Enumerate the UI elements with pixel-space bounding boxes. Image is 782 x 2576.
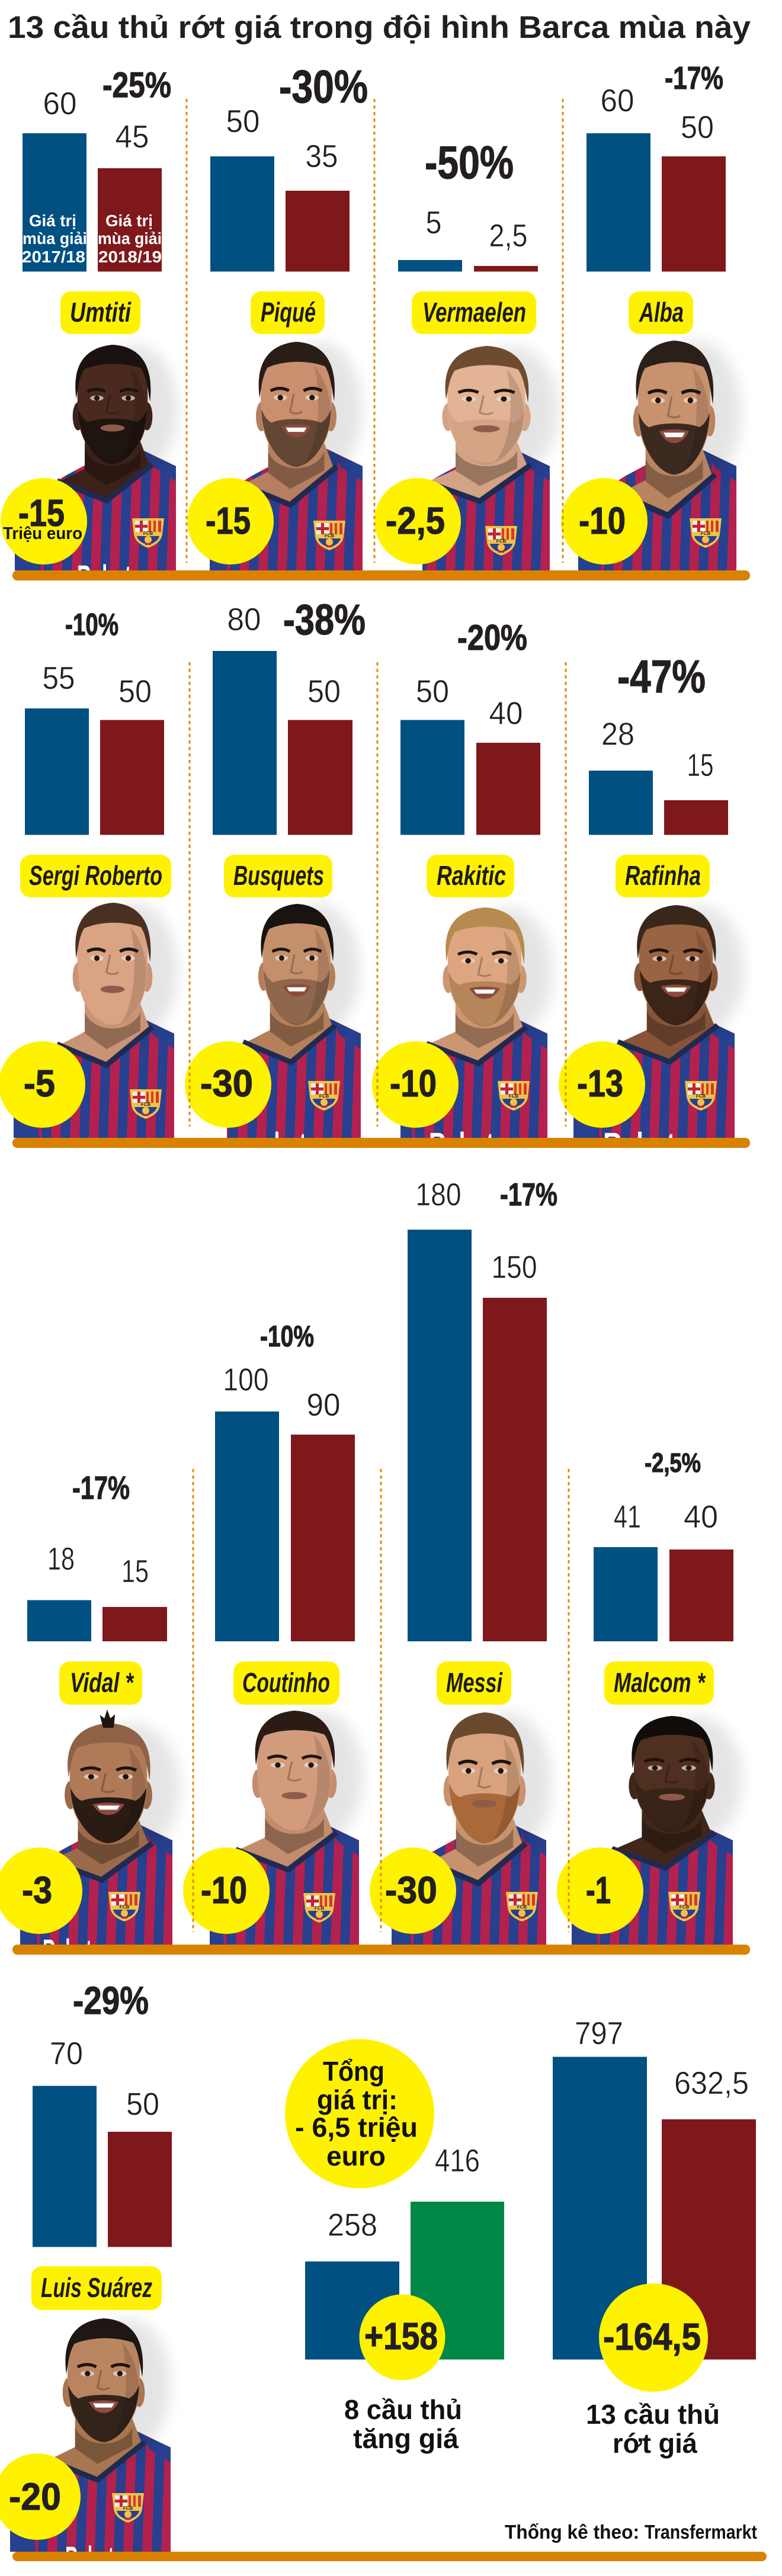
value 70: 70 <box>50 2036 83 2071</box>
badge: -10 <box>372 1041 459 1128</box>
percent -50%: -50% <box>425 136 514 188</box>
bar: Vermaelen 2018/19 <box>474 266 538 271</box>
badge: -15: -15 <box>206 499 251 542</box>
bar: Coutinho 2017/18 <box>215 1411 279 1641</box>
bar: Alba 2018/19 <box>662 156 726 271</box>
badge: -1: -1 <box>586 1869 611 1911</box>
label: 13 players down: 13 cầu thủ <box>586 2399 720 2430</box>
badge: -5: -5 <box>24 1062 55 1105</box>
value 797: 797 <box>575 2016 623 2051</box>
name pill: Rakitic: Rakitic <box>437 860 506 891</box>
source note: Thống kê theo: <box>505 2521 639 2543</box>
title: 13 cầu thủ rớt giá trong đội hình Barca mùa này <box>8 10 751 45</box>
panel: Rakitic <box>372 618 553 1163</box>
value 18: 18 <box>47 1541 75 1577</box>
name pill: Umtiti: Umtiti <box>70 297 132 328</box>
name pill: Umtiti <box>60 291 140 334</box>
name pill: Piqué <box>251 291 325 334</box>
bar: Sergi Roberto 2017/18 <box>25 708 89 835</box>
value 40: 40 <box>684 1499 718 1535</box>
legend text: 2017/18: mùa giải <box>23 229 87 248</box>
name pill: Rafinha <box>616 855 710 897</box>
value 15: 15 <box>687 748 713 783</box>
percent -38%: -38% <box>283 596 366 644</box>
source note: Transfermarkt <box>645 2521 757 2543</box>
bar: Suárez 2017/18 <box>33 2086 97 2247</box>
value 100: 100 <box>223 1362 269 1398</box>
callout: total value: - 6,5 triệu <box>295 2112 418 2143</box>
value 150: 150 <box>492 1250 537 1285</box>
bar: 8 players 2018/19 <box>411 2202 504 2360</box>
badge: -1 <box>557 1847 643 1934</box>
legend text: 2018/19 <box>98 211 162 266</box>
panel: 13 players lost value <box>553 2016 756 2459</box>
bar: Messi 2017/18 <box>408 1230 472 1641</box>
portrait: Piqué <box>188 342 363 570</box>
bar: Suárez 2018/19 <box>108 2132 172 2247</box>
badge: -10 <box>183 1847 270 1934</box>
panel: Rafinha <box>559 650 745 1163</box>
badge: -164,5: -164,5 <box>603 2315 701 2358</box>
bar: 13 players 2018/19 <box>662 2119 756 2360</box>
value 50: 50 <box>307 674 341 710</box>
name pill: Coutinho: Coutinho <box>242 1667 330 1698</box>
badge: +158: +158 <box>364 2315 438 2357</box>
bar: Malcom 2017/18 <box>594 1547 658 1641</box>
badge: -13 <box>559 1041 645 1128</box>
value 41: 41 <box>614 1499 641 1535</box>
badge: -15 million euro <box>1 478 87 564</box>
panel: Messi <box>370 1177 557 1945</box>
badge: -10: -10 <box>390 1062 437 1105</box>
percent -17%: -17% <box>500 1177 557 1212</box>
badge: -15 million euro: -15 <box>18 492 65 534</box>
bar: Vermaelen 2017/18 <box>398 260 462 271</box>
badge: -20: -20 <box>9 2475 61 2518</box>
value 60: 60 <box>601 83 634 118</box>
value 28: 28 <box>601 717 634 752</box>
name pill: Alba: Alba <box>639 297 684 328</box>
value 416: 416 <box>435 2143 480 2179</box>
badge: -3 <box>0 1847 82 1934</box>
badge: -15 million euro: Triệu euro <box>3 524 82 543</box>
label: 13 players down: rớt giá <box>613 2428 697 2459</box>
bar: 8 players 2017/18 <box>305 2261 399 2360</box>
name pill: Rakitic <box>427 855 514 897</box>
portrait: Rafinha <box>560 905 745 1163</box>
legend text: 2018/19: mùa giải <box>98 229 162 248</box>
name pill: Malcom <box>604 1661 714 1705</box>
portrait: Suárez <box>0 2318 171 2576</box>
bar: Piqué 2017/18 <box>210 156 274 271</box>
name pill: Malcom: Malcom * <box>614 1667 706 1698</box>
portrait: Vidal: Rakuten <box>43 1932 113 1969</box>
legend text: 2018/19: 2018/19 <box>98 248 162 266</box>
percent -20%: -20% <box>457 618 527 657</box>
portrait: Vermaelen <box>375 346 559 570</box>
name pill: Vermaelen <box>412 291 536 334</box>
callout: total value: giá trị: <box>317 2084 398 2115</box>
name pill: Vidal <box>59 1661 142 1705</box>
value 15: 15 <box>121 1554 149 1589</box>
portrait: Rakitic <box>373 907 553 1163</box>
badge: -10: -10 <box>201 1869 247 1911</box>
portrait: Umtiti <box>1 345 178 595</box>
badge: -13: -13 <box>577 1062 623 1105</box>
portrait: Vidal <box>0 1709 180 1969</box>
legend text: 2017/18: 2017/18 <box>22 248 85 266</box>
bar: Rafinha 2018/19 <box>664 800 728 835</box>
bar: Sergi Roberto 2018/19 <box>100 720 164 835</box>
portrait: Busquets <box>186 904 361 1163</box>
panel: row 3 players <box>0 1177 742 1969</box>
callout: total value: euro <box>326 2141 386 2171</box>
value 50: 50 <box>416 674 449 710</box>
bar: Umtiti 2017/18 <box>23 133 86 271</box>
value 632,5: 632,5 <box>674 2065 749 2101</box>
value 50: 50 <box>118 674 152 710</box>
bar: 13 players 2017/18 <box>553 2057 647 2360</box>
value 35: 35 <box>306 139 338 174</box>
value 180: 180 <box>416 1177 461 1212</box>
bar: Busquets 2017/18 <box>213 651 277 835</box>
bar: Vidal 2018/19 <box>102 1607 167 1641</box>
percent -17%: -17% <box>665 60 723 96</box>
badge: -2,5: -2,5 <box>386 499 445 542</box>
percent -10%: -10% <box>260 1320 314 1353</box>
badge: -2,5 <box>374 478 461 564</box>
bar: Rafinha 2017/18 <box>589 771 653 835</box>
badge: -10 <box>561 478 648 564</box>
badge: -30: -30 <box>385 1869 437 1911</box>
badge: -15 <box>187 478 274 564</box>
panel: Piqué <box>187 60 368 570</box>
value 55: 55 <box>43 660 75 696</box>
bar: Piqué 2018/19 <box>286 191 350 271</box>
name pill: Sergi Roberto: Sergi Roberto <box>29 860 162 891</box>
label: 8 players up: 8 cầu thủ <box>344 2394 462 2425</box>
legend text: 2018/19: Giá trị <box>105 211 153 230</box>
name pill: Busquets <box>224 855 332 897</box>
value 258: 258 <box>328 2207 377 2243</box>
percent -2,5%: -2,5% <box>645 1448 701 1478</box>
name pill: Rafinha: Rafinha <box>625 860 701 891</box>
panel: Umtiti <box>1 65 178 595</box>
badge: -10: -10 <box>579 499 626 542</box>
portrait: Coutinho <box>184 1711 364 1945</box>
panel: Busquets <box>185 596 366 1163</box>
panel: 8 players gained value <box>285 2039 504 2454</box>
value 80: 80 <box>227 602 261 637</box>
legend text: 2017/18: Giá trị <box>29 211 76 230</box>
label: 8 players up <box>344 2394 462 2454</box>
badge: -5 <box>0 1041 85 1128</box>
name pill: Luis Suárez <box>31 2266 162 2310</box>
panel: Coutinho <box>183 1320 364 1945</box>
label: 13 players down <box>586 2399 720 2459</box>
bar: Malcom 2018/19 <box>669 1550 733 1641</box>
badge: -164,5 <box>599 2283 708 2392</box>
value 45: 45 <box>115 119 149 155</box>
source note <box>505 2521 757 2543</box>
name pill: Busquets: Busquets <box>233 860 324 891</box>
panel: Malcom <box>557 1448 742 1945</box>
label: 8 players up: tăng giá <box>353 2423 459 2454</box>
name pill: Vermaelen: Vermaelen <box>422 297 526 328</box>
panel: Sergi Roberto <box>0 608 178 1138</box>
panel: Alba <box>561 60 741 570</box>
name pill: Vidal: Vidal * <box>70 1667 134 1698</box>
percent -10%: -10% <box>65 608 118 642</box>
legend text: 2017/18 <box>22 211 87 266</box>
name pill: Alba <box>629 291 693 334</box>
percent -25%: -25% <box>102 65 171 105</box>
name pill: Messi <box>437 1661 511 1705</box>
bar: Busquets 2018/19 <box>288 720 352 835</box>
portrait: Rafinha: Rakuten <box>603 1125 706 1163</box>
value 5: 5 <box>425 205 442 240</box>
panel: row 1 players <box>1 60 741 595</box>
portrait: Messi <box>371 1712 552 1945</box>
bar: Coutinho 2018/19 <box>291 1435 355 1641</box>
bar: Vidal 2017/18 <box>27 1600 91 1641</box>
bar: Rakitic 2017/18 <box>400 720 464 835</box>
value 90: 90 <box>307 1387 340 1423</box>
value 60: 60 <box>43 86 77 121</box>
percent -47%: -47% <box>617 650 706 702</box>
panel: Luis Suárez <box>0 1978 172 2576</box>
portrait: Malcom <box>558 1716 742 1945</box>
callout: total value: Tổng <box>323 2056 384 2087</box>
portrait: Alba <box>562 341 741 570</box>
value 40: 40 <box>489 695 523 731</box>
callout: total value <box>285 2039 434 2188</box>
name pill: Messi: Messi <box>446 1667 503 1698</box>
badge: -30: -30 <box>200 1062 253 1105</box>
percent -17%: -17% <box>72 1469 130 1506</box>
bar: Rakitic 2018/19 <box>476 743 540 835</box>
name pill: Piqué: Piqué <box>261 297 316 328</box>
badge: -30 <box>185 1041 271 1128</box>
badge: -20 <box>0 2453 81 2540</box>
badge: -3: -3 <box>22 1869 52 1911</box>
value 50: 50 <box>226 104 259 139</box>
bar: Umtiti 2018/19 <box>98 168 162 271</box>
value 50: 50 <box>126 2086 159 2122</box>
bar: Alba 2017/18 <box>586 133 650 271</box>
panel: Vidal <box>0 1469 180 1969</box>
bar: Messi 2018/19 <box>483 1298 547 1641</box>
panel: Vermaelen <box>374 136 559 570</box>
percent -30%: -30% <box>279 60 368 113</box>
panel: row 2 players <box>0 596 745 1163</box>
name pill: Luis Suárez: Luis Suárez <box>41 2272 152 2303</box>
badge: -30 <box>370 1847 456 1934</box>
portrait: Sergi Roberto <box>0 903 178 1138</box>
name pill: Coutinho <box>233 1661 339 1705</box>
name pill: Sergi Roberto <box>20 855 171 897</box>
value 50: 50 <box>681 110 714 145</box>
percent -29%: -29% <box>73 1978 149 2022</box>
value 2,5: 2,5 <box>489 218 527 254</box>
badge: +158 <box>359 2295 446 2380</box>
